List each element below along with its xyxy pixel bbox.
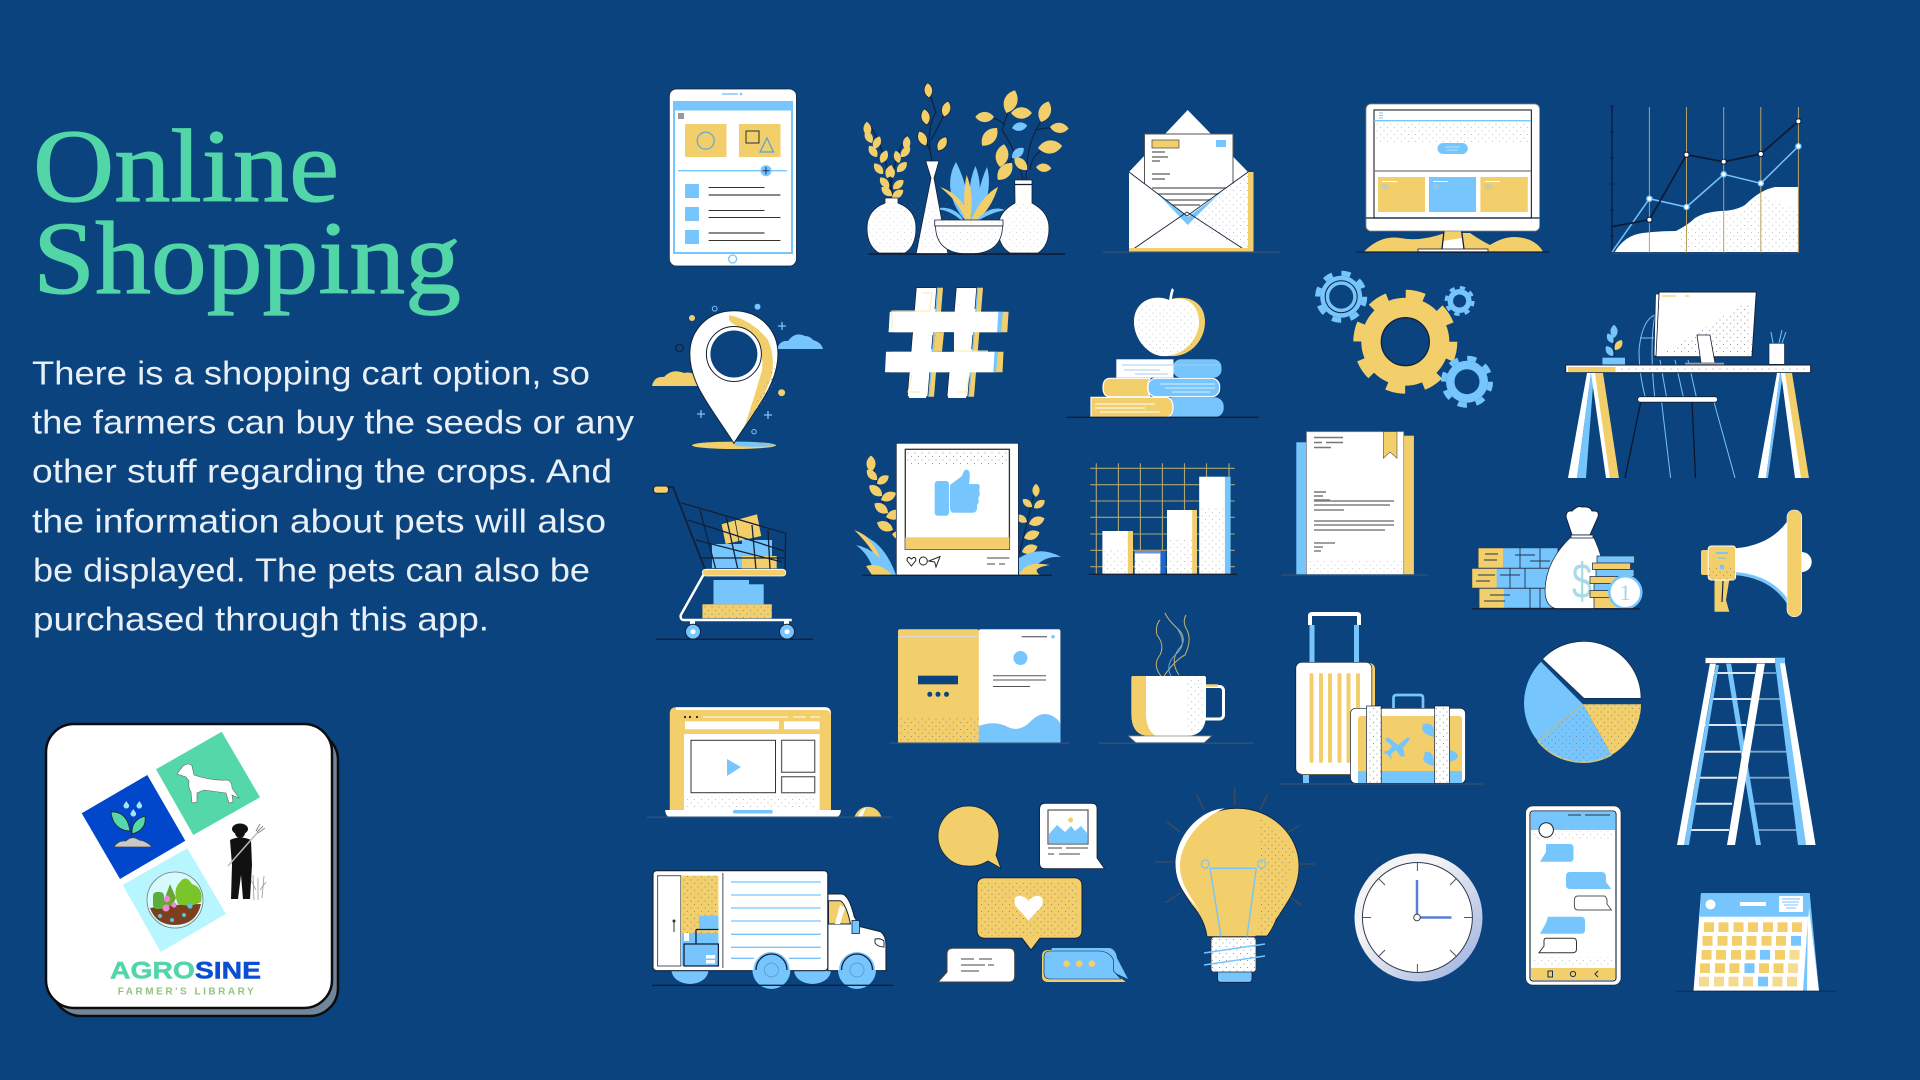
body text: purchased through this app. bbox=[33, 601, 489, 638]
logo tile: terrarium bbox=[123, 848, 226, 952]
shadow bbox=[692, 442, 776, 449]
icon: gears bbox=[1318, 273, 1490, 405]
thumbs up bbox=[935, 481, 949, 516]
icon: line chart bbox=[1610, 106, 1801, 253]
desk plant bbox=[1613, 325, 1615, 357]
icon: clock bbox=[1354, 854, 1482, 982]
front rungs bbox=[1686, 673, 1755, 830]
icon: pie chart bbox=[1524, 641, 1641, 762]
icon: smartphone chat bbox=[1526, 806, 1621, 985]
icon: money bag and cash bbox=[1472, 506, 1641, 609]
title: Shopping bbox=[33, 201, 461, 316]
icon: tablet bbox=[669, 89, 796, 266]
wheat and branches bbox=[862, 82, 1069, 201]
icon: open envelope bbox=[1103, 110, 1280, 252]
icon: hashtag bbox=[885, 288, 1009, 398]
middle book bbox=[1148, 378, 1220, 397]
icon: megaphone bbox=[1701, 510, 1812, 617]
icon: document book bbox=[1281, 432, 1428, 575]
title: Online bbox=[33, 109, 339, 224]
body text bbox=[32, 354, 635, 638]
body text: the farmers can buy the seeds or any bbox=[32, 404, 635, 441]
yellow cloud bbox=[652, 371, 710, 386]
icon: desk calendar bbox=[1676, 893, 1836, 991]
tabletop bbox=[1566, 365, 1811, 373]
front legs bbox=[1677, 663, 1716, 845]
icon: apple on books bbox=[1066, 288, 1259, 417]
icon: light bulb bbox=[1155, 787, 1315, 982]
logo tile: seedling bbox=[82, 775, 185, 879]
coin stack bbox=[1590, 556, 1634, 608]
icon: location pin bbox=[652, 304, 823, 449]
suitcase handle bbox=[1310, 614, 1359, 663]
blue bubble bbox=[1042, 948, 1128, 982]
bowl foliage bbox=[933, 162, 1005, 221]
icon: money bag and cash: 1 bbox=[1620, 580, 1631, 605]
monitor back bbox=[1656, 292, 1756, 357]
logo figure: farmer bbox=[228, 824, 266, 900]
top book bbox=[1173, 359, 1222, 378]
post actions bbox=[907, 557, 916, 566]
bottom book bbox=[1165, 397, 1224, 417]
icon: social media like post bbox=[854, 443, 1061, 575]
icon: plants in vases bbox=[862, 82, 1069, 254]
icon: delivery truck bbox=[652, 871, 893, 989]
body text: the information about pets will also bbox=[32, 502, 606, 540]
rear legs bbox=[1726, 663, 1761, 845]
logo tile: dog bbox=[156, 732, 260, 835]
desk legs bbox=[1568, 373, 1591, 478]
icon: luggage bbox=[1280, 614, 1483, 784]
icon: step ladder bbox=[1677, 658, 1816, 845]
image card bubble bbox=[1040, 803, 1104, 869]
icon: bar chart bbox=[1089, 463, 1237, 574]
title bbox=[33, 109, 461, 316]
logo wordmark: AGRO SINE bbox=[110, 957, 261, 984]
packages bbox=[722, 514, 761, 544]
icon: shopping cart bbox=[654, 486, 813, 639]
pencil cup bbox=[1771, 330, 1786, 343]
logo card bbox=[46, 724, 338, 1016]
icon: laptop bbox=[647, 707, 892, 817]
icon: coffee cup bbox=[1099, 613, 1254, 743]
small white bubble bbox=[938, 948, 1015, 982]
briefcase bbox=[1350, 695, 1466, 783]
icon: desktop monitor bbox=[1356, 104, 1549, 252]
speech bubble yellow bbox=[938, 806, 1001, 868]
icon: chat bubbles bbox=[938, 803, 1128, 982]
bag bbox=[1545, 536, 1606, 609]
icon: brochure bbox=[889, 629, 1069, 743]
vases bbox=[867, 161, 1049, 254]
icon: money bag and cash: $ bbox=[1572, 553, 1592, 609]
icon: desk with monitor bbox=[1566, 292, 1811, 478]
rear rungs bbox=[1748, 673, 1804, 830]
right foliage bbox=[1014, 484, 1061, 575]
body text: other stuff regarding the crops. And bbox=[32, 453, 612, 490]
logo tagline: FARMER'S LIBRARY bbox=[118, 986, 254, 997]
blue cloud bbox=[777, 334, 823, 349]
body text: be displayed. The pets can also be bbox=[33, 552, 590, 589]
cash stacks bbox=[1472, 547, 1558, 608]
left foliage bbox=[854, 455, 909, 575]
heart bubble bbox=[977, 878, 1082, 950]
chair bbox=[1625, 315, 1735, 478]
body text: There is a shopping cart option, so bbox=[32, 354, 590, 392]
